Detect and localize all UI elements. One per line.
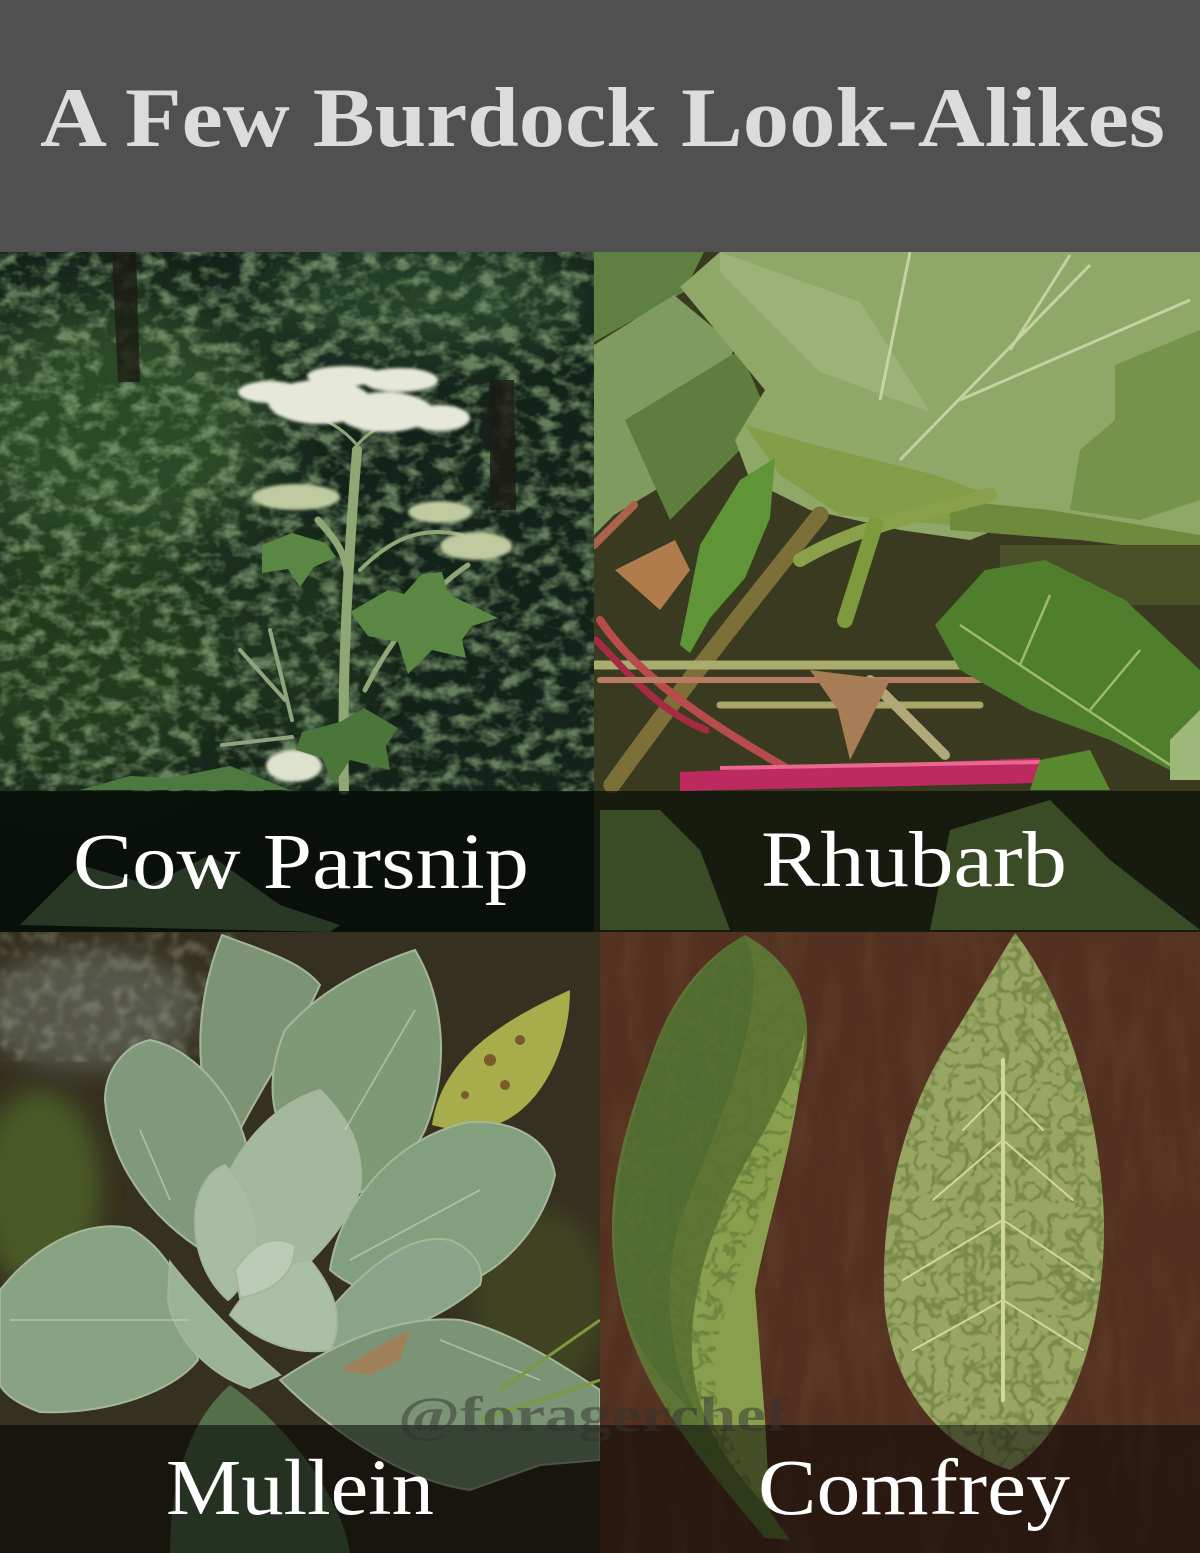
tree trunks [112,252,516,510]
big leaf [680,252,1200,542]
label: Mullein: Mullein [166,1445,434,1532]
dead leaves [615,540,690,610]
small curled leaf [680,458,775,653]
watermark: @foragerchef [398,1386,790,1442]
stems [594,495,990,785]
header band [0,0,1200,252]
label: Cow Parsnip: Cow Parsnip [73,819,529,906]
green stems [480,1320,600,1420]
parsnip leaves [80,533,498,790]
panel: cow parsnip [0,250,594,932]
label bar [0,791,594,932]
left leaf [612,935,807,1540]
title: A Few Burdock Look-Alikes [40,71,1165,165]
panel: rhubarb [594,252,1200,932]
label bar [600,1425,1200,1553]
side umbels [252,484,512,782]
panel: mullein [0,932,610,1553]
stalks [300,410,468,790]
label bar [594,791,1200,932]
front lower leaf [935,560,1200,770]
panel: comfrey [600,932,1200,1553]
label: Comfrey: Comfrey [758,1445,1071,1532]
yellow leaf [432,990,570,1130]
back leaves [594,252,704,342]
right leaf [884,933,1104,1470]
rosette leaves [0,935,600,1490]
flower head: main umbel [238,366,470,432]
label: Rhubarb: Rhubarb [761,817,1067,904]
bottom leaf [170,1385,350,1553]
right understory [1000,545,1200,605]
label bar [0,1425,600,1553]
pink stem [680,758,1040,791]
